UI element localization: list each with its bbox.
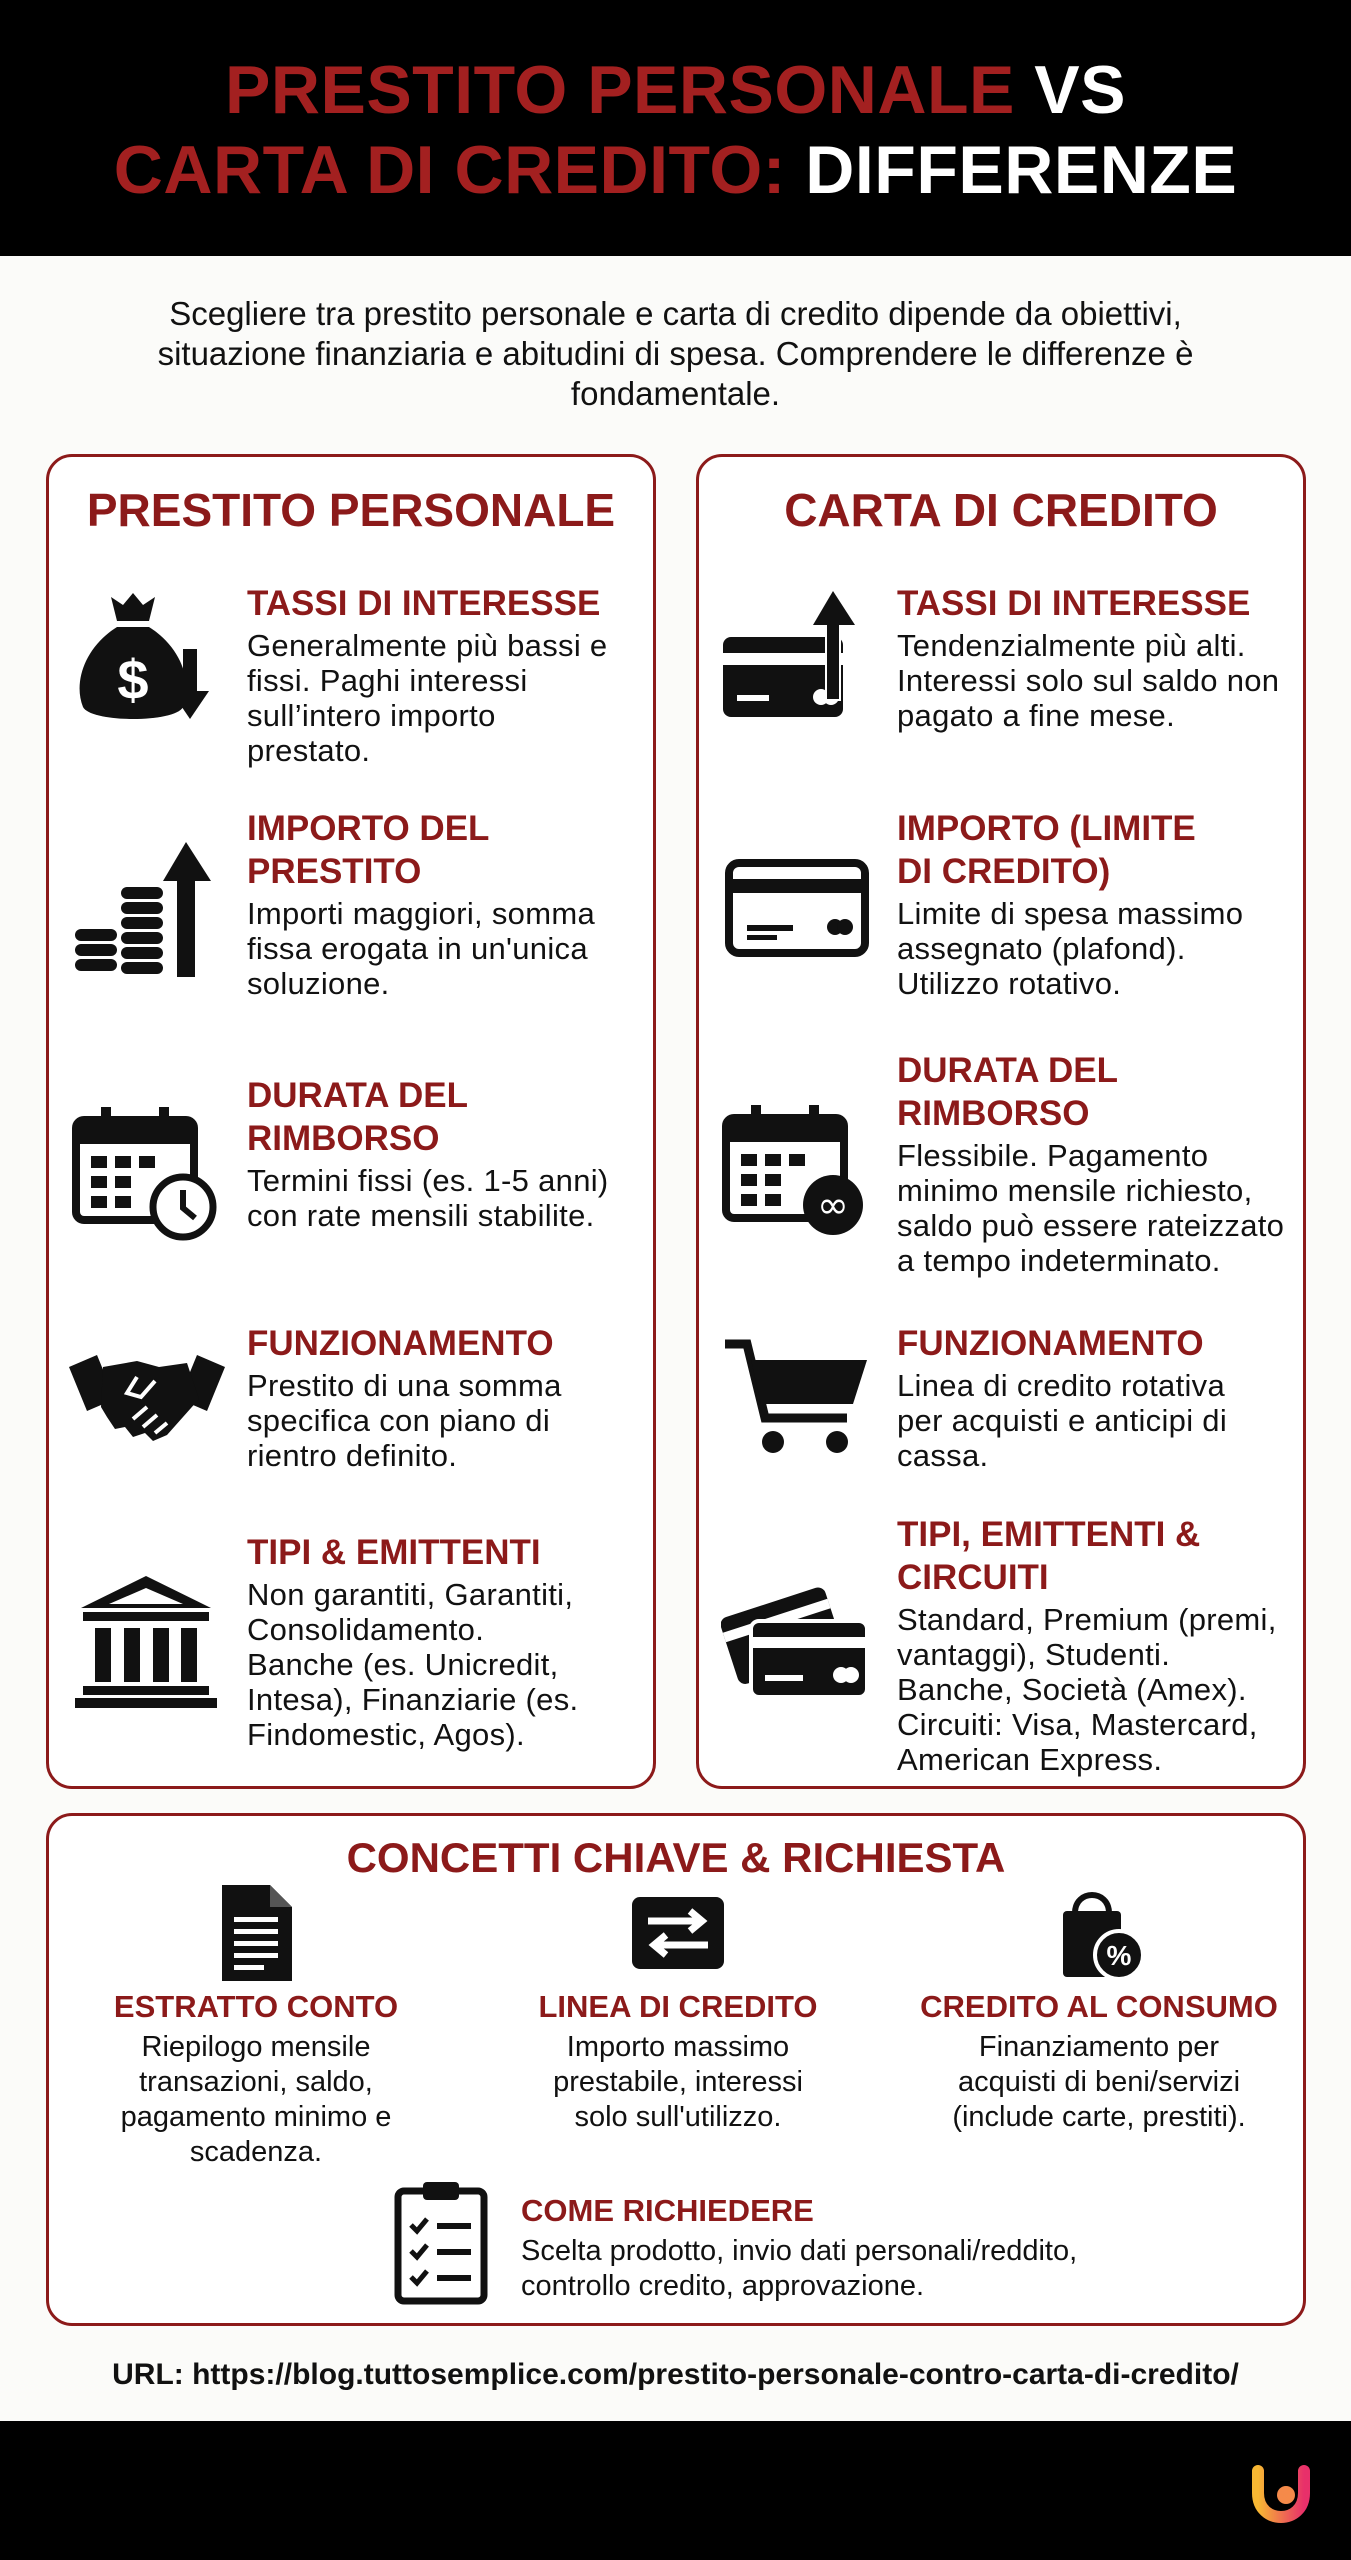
item: durata: saldo può essere rateizzato [897,1208,1284,1243]
icon: card up arrow [723,591,855,717]
icon: coins up arrow [75,842,211,977]
header bar: PRESTITO PERSONALE VS [225,52,1126,128]
item: tipi: Standard, Premium (premi, [897,1602,1277,1637]
column: estratto conto: transazioni, saldo, [139,2066,373,2098]
item: importo: IMPORTO (LIMITE [897,809,1196,848]
column: credito al consumo: CREDITO AL CONSUMO [920,1989,1278,2024]
panel: concetti chiave [46,1813,1306,2326]
icon: calendar clock [72,1107,216,1240]
footer bar [0,2421,1351,2560]
item: come richiedere: controllo credito, approvazione. [521,2270,924,2302]
item: tassi: TASSI DI INTERESSE [247,584,600,623]
item: tipi: Banche (es. Unicredit, [247,1647,559,1682]
icon: shopping cart [725,1340,867,1453]
item: tassi: sull’intero importo [247,698,496,733]
item: tassi: Interessi solo sul saldo non [897,663,1279,698]
item: funzionamento [897,1324,1227,1473]
item: tassi: fissi. Paghi interessi [247,663,528,698]
item: tipi: Findomestic, Agos). [247,1717,525,1752]
item: importo: Utilizzo rotativo. [897,966,1121,1001]
item: funzionamento: cassa. [897,1438,988,1473]
item: durata: minimo mensile richiesto, [897,1173,1252,1208]
item: tipi: Consolidamento. [247,1612,484,1647]
icon: logo [1252,2465,1310,2523]
column: credito al consumo: acquisti di beni/servizi [958,2066,1240,2098]
icon: checklist clipboard [394,2182,488,2304]
intro text: Scegliere tra prestito personale e carta di credito dipende da obiettivi, [169,295,1182,332]
item: tassi: TASSI DI INTERESSE [897,584,1250,623]
header bar [0,0,1351,256]
item: importo: Importi maggiori, somma [247,896,595,931]
item: tassi [897,584,1279,733]
item: importo [897,809,1243,1001]
item: importo: Limite di spesa massimo [897,896,1243,931]
panel heading: PRESTITO PERSONALE [87,484,615,536]
item: tipi [247,1533,578,1752]
intro text [158,295,1193,412]
icon: money bag down arrow [80,593,209,719]
item: come richiedere [521,2193,1077,2302]
column: estratto conto [114,1885,398,2168]
item: funzionamento: rientro definito. [247,1438,457,1473]
column: linea di credito: prestabile, interessi [553,2066,803,2098]
item: tipi: Circuiti: Visa, Mastercard, [897,1707,1258,1742]
item: durata: DURATA DEL [897,1051,1118,1090]
item: durata: DURATA DEL [247,1076,468,1115]
item: tassi: pagato a fine mese. [897,698,1175,733]
title [114,52,1237,208]
item: tassi: Generalmente più bassi e [247,628,607,663]
column: linea di credito [538,1897,818,2133]
column: estratto conto: pagamento minimo e [121,2101,391,2133]
column: linea di credito: solo sull'utilizzo. [574,2101,782,2133]
item: funzionamento: Prestito di una somma [247,1368,562,1403]
item: tipi: Non garantiti, Garantiti, [247,1577,573,1612]
item: durata [897,1051,1284,1278]
bottom heading: CONCETTI CHIAVE & RICHIESTA [347,1834,1005,1881]
item: importo: IMPORTO DEL [247,809,489,848]
column: credito al consumo: (include carte, prestiti). [952,2101,1246,2133]
icon: document [222,1885,292,1981]
item: funzionamento: per acquisti e anticipi di [897,1403,1227,1438]
header bar: CARTA DI CREDITO: DIFFERENZE [114,132,1237,208]
icon: calendar infinity: ∞ [817,1183,849,1227]
column: credito al consumo [920,1892,1278,2133]
item: durata: Flessibile. Pagamento [897,1138,1208,1173]
column: linea di credito: LINEA DI CREDITO [538,1989,818,2024]
item: tipi: CIRCUITI [897,1558,1049,1597]
item: funzionamento [247,1324,562,1473]
intro text: fondamentale. [571,375,780,412]
item: durata: Termini fissi (es. 1-5 anni) [247,1163,609,1198]
panel: carta di credito [696,454,1306,1789]
item: tassi: prestato. [247,733,370,768]
item: tassi [247,584,607,768]
item: funzionamento: FUNZIONAMENTO [247,1324,554,1363]
item: tipi: American Express. [897,1742,1162,1777]
column: estratto conto: Riepilogo mensile [142,2031,370,2063]
intro text: situazione finanziaria e abitudini di spesa. Comprendere le differenze è [158,335,1193,372]
item: durata: RIMBORSO [247,1119,440,1158]
item: importo: fissa erogata in un'unica [247,931,588,966]
item: durata [247,1076,609,1233]
item: durata: con rate mensili stabilite. [247,1198,595,1233]
icon: money bag down arrow: $ [117,648,149,711]
panel heading: CARTA DI CREDITO [784,484,1218,536]
column: linea di credito: Importo massimo [567,2031,789,2063]
item: importo: assegnato (plafond). [897,931,1186,966]
item: importo: PRESTITO [247,852,421,891]
column: estratto conto: scadenza. [190,2136,322,2168]
icon: calendar infinity [722,1105,863,1235]
url: URL: https://blog.tuttosemplice.com/prestito-personale-contro-carta-di-credito/ [112,2358,1239,2391]
column: estratto conto: ESTRATTO CONTO [114,1989,398,2024]
item: importo: DI CREDITO) [897,852,1110,891]
item: come richiedere: Scelta prodotto, invio dati personali/reddito, [521,2235,1077,2267]
icon: handshake [69,1355,225,1441]
item: tipi: TIPI & EMITTENTI [247,1533,541,1572]
item: funzionamento: Linea di credito rotativa [897,1368,1225,1403]
item: importo [247,809,595,1001]
item: durata: RIMBORSO [897,1094,1090,1133]
icon: bag percent [1063,1892,1141,1977]
icon: credit card [725,859,869,957]
icon: exchange arrows [632,1897,724,1969]
item: tipi [897,1515,1277,1777]
icon: bank [75,1576,217,1708]
icon: bag percent: % [1107,1940,1132,1971]
panel: prestito personale [46,454,656,1789]
item: tipi: vantaggi), Studenti. [897,1637,1170,1672]
item: importo: soluzione. [247,966,390,1001]
item: tassi: Tendenzialmente più alti. [897,628,1246,663]
item: tipi: TIPI, EMITTENTI & [897,1515,1200,1554]
item: tipi: Intesa), Finanziarie (es. [247,1682,578,1717]
item: funzionamento: specifica con piano di [247,1403,550,1438]
item: tipi: Banche, Società (Amex). [897,1672,1247,1707]
icon: cards [721,1588,865,1695]
column: credito al consumo: Finanziamento per [979,2031,1219,2063]
item: funzionamento: FUNZIONAMENTO [897,1324,1204,1363]
item: come richiedere: COME RICHIEDERE [521,2193,814,2228]
item: durata: a tempo indeterminato. [897,1243,1221,1278]
